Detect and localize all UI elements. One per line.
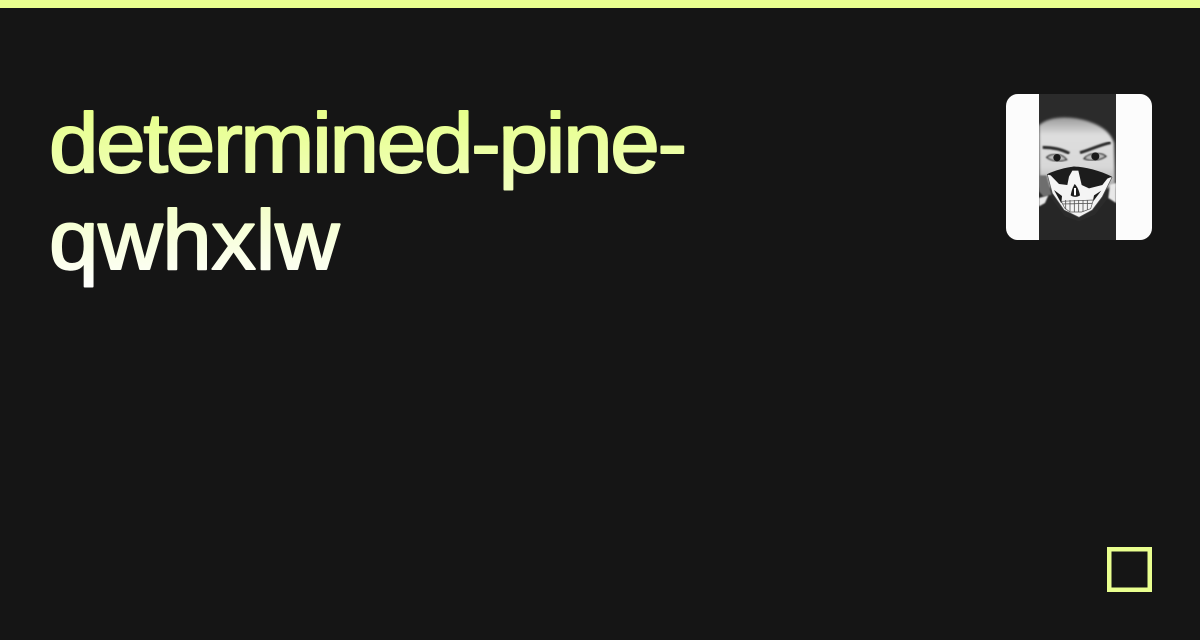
title — [49, 97, 687, 288]
top accent bar — [0, 0, 1200, 8]
title: determined-pine- — [49, 97, 687, 190]
square logo mark — [1107, 547, 1152, 592]
title: qwhxlw — [49, 194, 340, 287]
avatar: masked face photo — [1006, 94, 1152, 240]
